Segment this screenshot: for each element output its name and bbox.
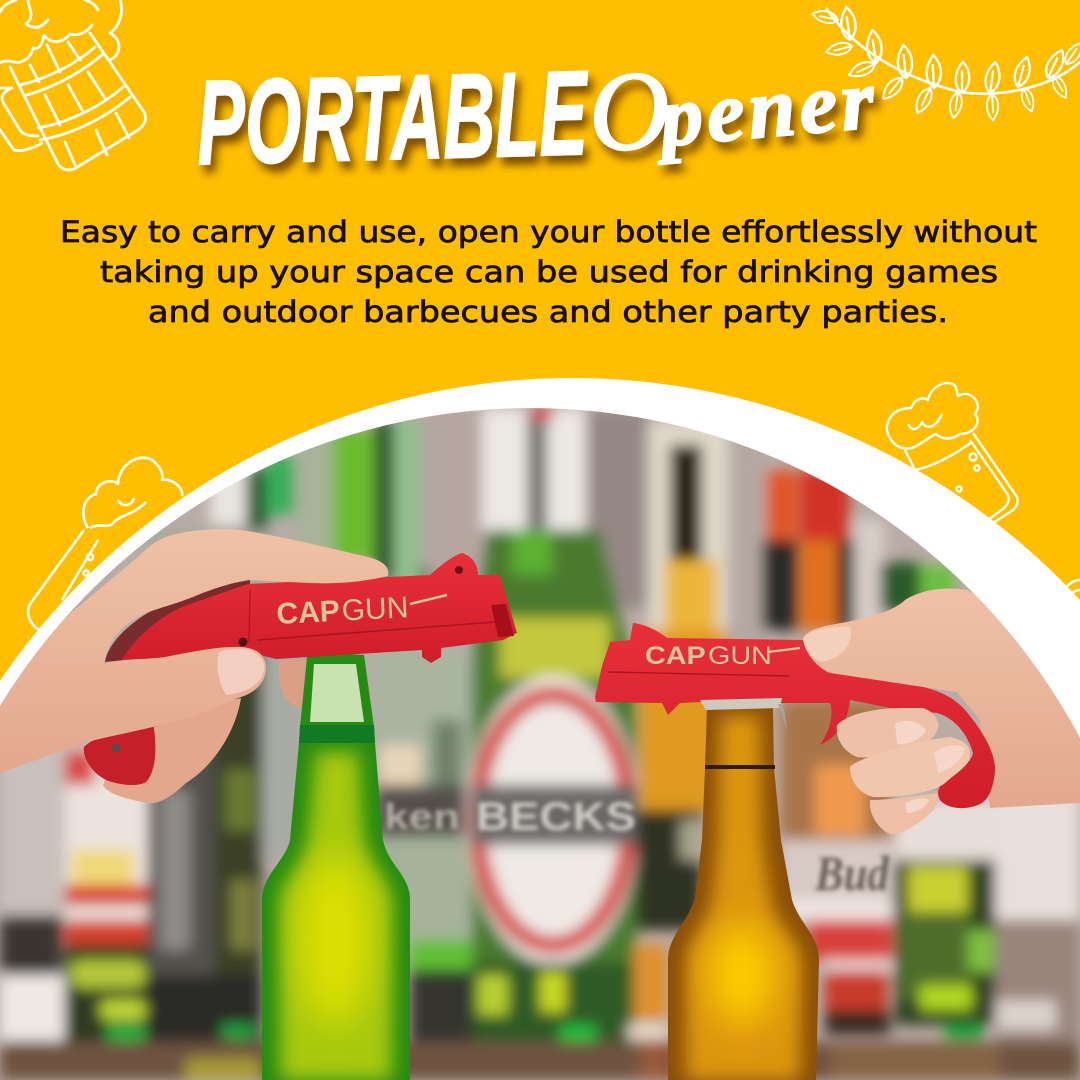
lower fingers [103, 698, 241, 803]
hand shadow [105, 580, 250, 662]
amber bottle [628, 420, 766, 1040]
right hand and cap gun [595, 588, 1080, 834]
amber glow [712, 925, 772, 1025]
right hand palm [803, 588, 1080, 808]
icon: beer mugs top left [0, 0, 146, 170]
gun logo left: CAPGUN [276, 591, 409, 631]
left hand back finger [278, 660, 307, 708]
green beer bottle [262, 654, 410, 1080]
description text: and outdoor barbecues and other party parties. [148, 295, 948, 329]
heading word: Opener: Opener [583, 28, 882, 177]
title [195, 28, 882, 190]
neck line [705, 765, 775, 769]
laurel leaves [811, 6, 1080, 121]
blurred beer bottles backdrop [0, 408, 1080, 1080]
right wall and table [0, 797, 1080, 1080]
inner lime glass [280, 752, 392, 1080]
laurel stem [826, 8, 1080, 94]
bottle cap metal [700, 698, 782, 710]
description text [60, 215, 1037, 329]
photo background [0, 400, 1080, 1080]
panel: product photo [0, 400, 1080, 1080]
lime glow [301, 855, 369, 1025]
Becks bottle [420, 408, 650, 1060]
grip screw [112, 744, 120, 752]
heading word: PORTABLE: PORTABLE [195, 46, 591, 190]
gun grip [84, 726, 156, 785]
description text: taking up your space can be used for drinking games [100, 255, 998, 289]
label text: Becks: BECKS [476, 795, 636, 839]
blurred label lettering [384, 799, 892, 894]
left grey column [0, 700, 64, 915]
finger nail top [803, 627, 851, 662]
gun body [120, 553, 517, 663]
hand and fingers [0, 529, 388, 773]
white arc band [0, 378, 1080, 1080]
thumb nail [218, 649, 264, 695]
frosted neck highlight [310, 664, 364, 722]
dark bottle [148, 455, 300, 1060]
label text: Heineken: ken [384, 796, 460, 837]
description text: Easy to carry and use, open your bottle effortlessly without [60, 215, 1037, 249]
neck band [299, 725, 375, 743]
red label bottle [65, 745, 149, 1061]
cap gun right [595, 623, 995, 808]
bottle silhouette [262, 654, 410, 1080]
bottle silhouette [668, 707, 819, 1080]
label text: Bud: Bud [814, 845, 890, 901]
icon: partial doodle right edge [1064, 580, 1080, 604]
left hand and cap gun [0, 529, 517, 803]
right hand fingers [837, 708, 970, 834]
Heineken bottle [262, 420, 472, 1060]
icon: laurel branch top right [811, 6, 1080, 121]
inner amber glass [686, 716, 802, 1080]
amber beer bottle [668, 707, 819, 1080]
Bud bottle [762, 470, 892, 1035]
icon: beer glass left [28, 458, 182, 632]
icon: beer glass right [887, 383, 1018, 523]
right green bottle [854, 520, 995, 1040]
gun logo right: CAPGUN [645, 642, 772, 670]
